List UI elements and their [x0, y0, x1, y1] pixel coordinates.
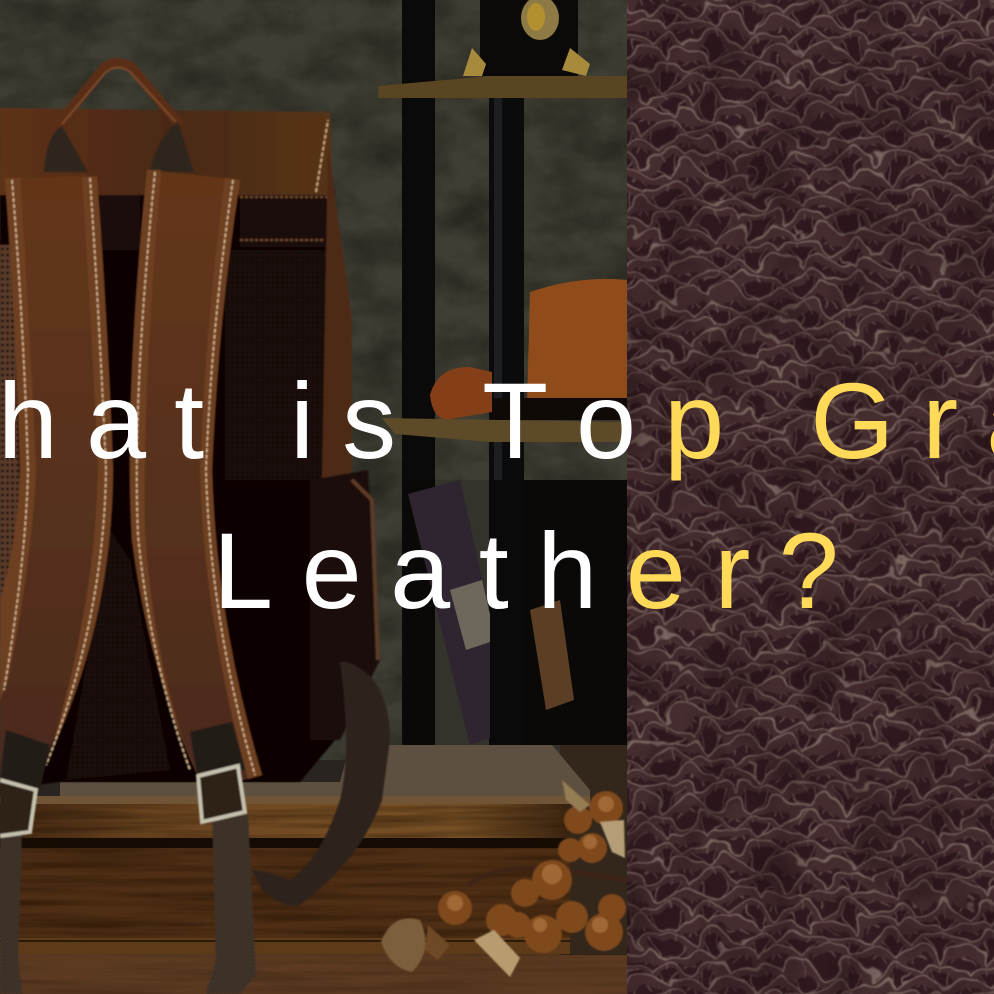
left buckle — [0, 780, 36, 836]
right buckle — [198, 766, 245, 822]
dried flowers — [381, 780, 627, 977]
lower shelf board — [382, 418, 627, 442]
orange hat — [430, 279, 627, 420]
mesh back panel — [66, 530, 170, 780]
backpack — [0, 63, 380, 790]
top handle — [58, 63, 180, 125]
webbing straps and buckles — [0, 662, 390, 994]
wall background — [0, 0, 627, 760]
shelf unit — [378, 0, 627, 745]
top shelf board — [378, 76, 627, 98]
right shoulder strap — [130, 170, 262, 790]
panel: leather texture — [590, 0, 994, 994]
side gusset — [322, 145, 352, 480]
clock on shelf — [463, 0, 590, 76]
title: Leather? — [213, 510, 867, 631]
left shoulder strap — [0, 176, 113, 790]
table and floor — [0, 745, 627, 994]
panel: backpack photo — [0, 0, 627, 994]
top flap — [0, 108, 333, 195]
handle webbing loops — [44, 126, 88, 172]
backpack body — [0, 190, 335, 790]
books — [405, 480, 627, 745]
